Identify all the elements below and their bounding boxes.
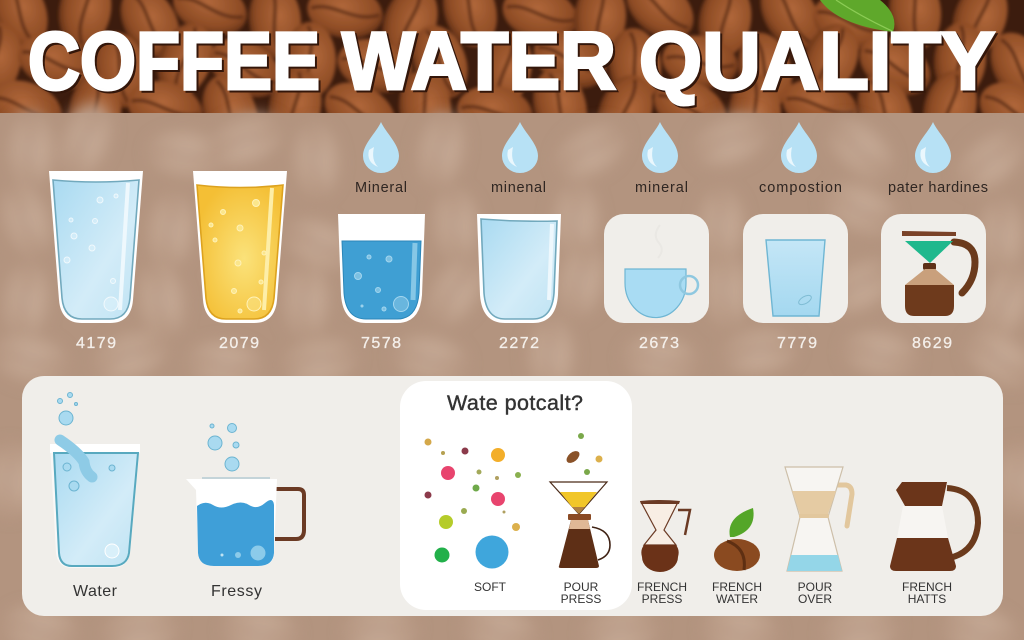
icon: drop 3 bbox=[642, 122, 678, 173]
banner background: coffee beans bbox=[0, 0, 1024, 157]
panel: brew methods bbox=[22, 376, 1003, 616]
title: COFFEE bbox=[28, 16, 320, 107]
label: french water: WATER bbox=[716, 592, 758, 606]
glass: pale water bbox=[477, 214, 561, 323]
value labels: 7779 bbox=[777, 335, 817, 352]
drop labels: compostion bbox=[759, 180, 842, 196]
label: soft: SOFT bbox=[474, 580, 507, 594]
value labels: 7578 bbox=[361, 335, 401, 352]
brown jug icon bbox=[890, 482, 978, 571]
title bbox=[28, 16, 997, 109]
tile: water glass bbox=[743, 214, 848, 323]
title: WATER bbox=[344, 18, 618, 109]
value labels: 2673 bbox=[639, 335, 679, 352]
title: QUALITY bbox=[639, 16, 995, 107]
drop labels: minenal bbox=[491, 180, 546, 196]
jug: blue water bbox=[186, 424, 304, 566]
value labels: 4179 bbox=[76, 335, 116, 352]
drop labels bbox=[355, 180, 988, 196]
glass: yellow water bbox=[193, 171, 287, 323]
title: WATER bbox=[342, 16, 616, 107]
tile: cup bbox=[604, 214, 709, 323]
icon: drop 2 bbox=[502, 122, 538, 173]
panel: water potential bbox=[400, 381, 632, 610]
mineral dots bbox=[424, 438, 521, 568]
label: french press: FRENCH bbox=[637, 580, 687, 594]
label: Water: Water bbox=[73, 583, 118, 600]
water drops row bbox=[363, 122, 951, 173]
value labels bbox=[76, 335, 952, 352]
label: Fressy: Fressy bbox=[211, 583, 262, 600]
coffee bean with leaf icon bbox=[714, 508, 760, 571]
icon: green leaf bbox=[820, 0, 894, 32]
glass: light blue water bbox=[49, 171, 143, 323]
icon: drop 5 bbox=[915, 122, 951, 173]
value labels: 8629 bbox=[912, 335, 952, 352]
value labels: 2272 bbox=[499, 335, 539, 352]
label: pour over: POUR bbox=[798, 580, 833, 594]
label: french water: FRENCH bbox=[712, 580, 762, 594]
title: QUALITY bbox=[641, 18, 997, 109]
label: pour press: POUR bbox=[564, 580, 599, 594]
drop labels: mineral bbox=[635, 180, 688, 196]
glass: water with splash bbox=[50, 392, 140, 568]
icon: drop 4 bbox=[781, 122, 817, 173]
label: pour press: PRESS bbox=[561, 592, 601, 606]
label: french press: PRESS bbox=[642, 592, 682, 606]
pour over chemex icon bbox=[785, 467, 852, 571]
title: COFFEE bbox=[30, 18, 322, 109]
glass: blue water bbox=[338, 214, 425, 323]
pour press dripper bbox=[550, 433, 610, 568]
drop labels: pater hardines bbox=[888, 180, 988, 196]
label: pour over: OVER bbox=[798, 592, 832, 606]
tile: coffee carafe bbox=[881, 214, 986, 323]
drop labels: Mineral bbox=[355, 180, 407, 196]
label: french hatts: FRENCH bbox=[902, 580, 952, 594]
heading: Wate potcalt? bbox=[447, 391, 583, 415]
label: french hatts: HATTS bbox=[908, 592, 946, 606]
icon: drop 1 bbox=[363, 122, 399, 173]
french press icon bbox=[640, 500, 690, 572]
value labels: 2079 bbox=[219, 335, 259, 352]
